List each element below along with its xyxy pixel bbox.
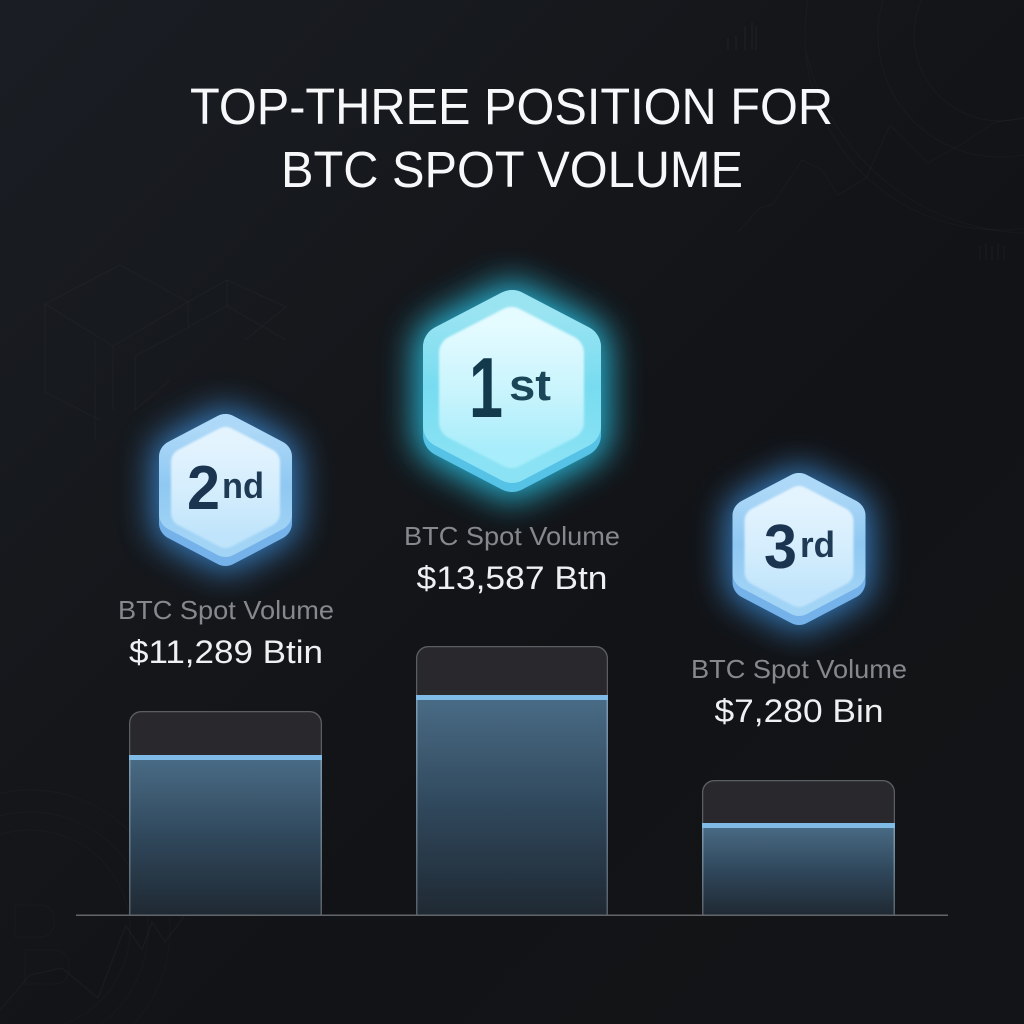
title [190, 78, 833, 198]
label: 3rd place volume: $7,280 Bin [714, 693, 884, 729]
label: 2nd place volume [118, 595, 334, 670]
label: 1st place volume: BTC Spot Volume [404, 521, 620, 551]
label: 3rd place volume: BTC Spot Volume [691, 654, 907, 684]
chart baseline [76, 914, 948, 916]
decorative pattern: isometric cubes left [45, 265, 286, 440]
bar: 3rd place [702, 780, 895, 926]
label: 1st place volume [404, 521, 620, 596]
label: 2nd place volume: $11,289 Btin [129, 634, 323, 670]
bar: 2nd place [129, 711, 322, 926]
badge: 3rd place: rd [800, 524, 835, 565]
title: BTC SPOT VOLUME [281, 141, 743, 198]
bar: 1st place [416, 646, 608, 926]
badge: 2nd place: 2 [187, 454, 220, 523]
title: TOP-THREE POSITION FOR [190, 78, 833, 135]
badge: 3rd place [750, 490, 848, 608]
badge: 1st place: 1 [469, 341, 503, 436]
decorative pattern: bitcoin coin bottom-left [0, 790, 240, 1024]
badge: 1st place: st [509, 361, 551, 410]
badge: 3rd place: 3 [764, 513, 797, 582]
label: 2nd place volume: BTC Spot Volume [118, 595, 334, 625]
label: 3rd place volume [691, 654, 907, 729]
decorative pattern: top-right circles and chart [728, 0, 1024, 260]
label: 1st place volume: $13,587 Btn [416, 560, 608, 596]
badge: 1st place [445, 312, 579, 470]
badge: 2nd place [176, 431, 275, 549]
badge: 2nd place: nd [222, 465, 264, 506]
